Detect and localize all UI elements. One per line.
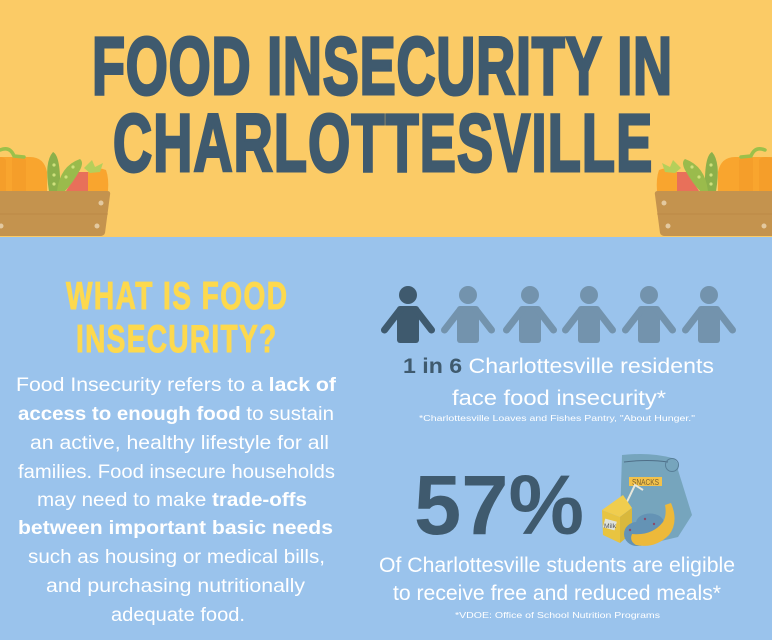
stat text: eligible students — [379, 554, 735, 605]
title — [92, 20, 672, 189]
text block: definition: an active, healthy lifestyle for all — [30, 433, 329, 454]
text block: definition: such as housing or medical bills, — [28, 547, 325, 568]
pictogram: 1 in 6 people — [384, 286, 732, 343]
icon: lunch bag with milk, cookies and banana: SNACKS — [632, 478, 659, 487]
heading: what is food insecurity — [66, 275, 287, 361]
stat text: eligible students: Of Charlottesville students are eligible — [379, 554, 735, 577]
icon: lunch bag with milk, cookies and banana — [602, 454, 692, 546]
text block: definition: may need to make trade-offs — [37, 490, 307, 511]
text block: definition — [16, 375, 337, 626]
title: FOOD INSECURITY IN — [92, 20, 672, 112]
icon: left vegetable crate — [0, 149, 110, 236]
stat: 57%: 57% — [414, 458, 584, 552]
background: yellow header — [0, 0, 772, 237]
source note: VDOE: *VDOE: Office of School Nutrition Programs — [455, 610, 660, 620]
stat text: 1 in 6 residents: 1 in 6 Charlottesville residents — [403, 355, 714, 378]
heading: what is food insecurity: INSECURITY? — [76, 318, 276, 361]
text block: definition: and purchasing nutritionally — [46, 576, 306, 597]
text block: definition: between important basic needs — [18, 518, 333, 539]
title: CHARLOTTESVILLE — [113, 97, 652, 189]
text block: definition: families. Food insecure households — [18, 462, 335, 483]
source note: Loaves and Fishes: *Charlottesville Loaves and Fishes Pantry, "About Hunger." — [419, 413, 695, 423]
background: blue body — [0, 237, 772, 640]
text block: definition: Food Insecurity refers to a lack of — [16, 375, 337, 396]
stat text: eligible students: to receive free and reduced meals* — [393, 582, 721, 605]
stat text: 1 in 6 residents: face food insecurity* — [452, 387, 666, 410]
text block: definition: access to enough food to sustain — [18, 404, 334, 425]
stat text: 1 in 6 residents — [403, 355, 714, 410]
text block: definition: adequate food. — [111, 605, 245, 626]
icon: right vegetable crate — [655, 149, 772, 236]
heading: what is food insecurity: WHAT IS FOOD — [66, 275, 287, 318]
icon: lunch bag with milk, cookies and banana: Milk — [604, 524, 617, 530]
